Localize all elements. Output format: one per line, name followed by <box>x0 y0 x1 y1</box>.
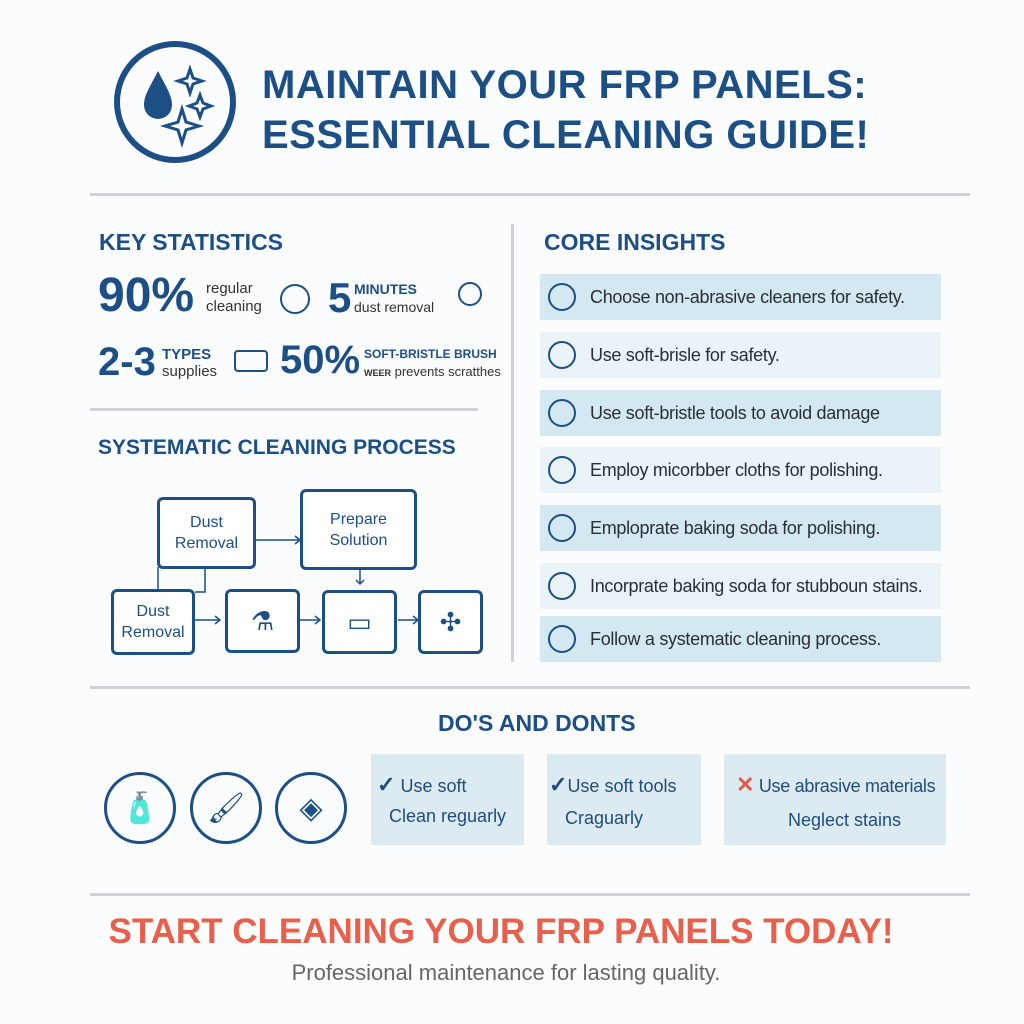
insights list: Use soft-bristle tools to avoid damage <box>590 402 880 422</box>
insights list: Emploprate baking soda for polishing. <box>590 518 880 538</box>
do box 1: Clean reguarly <box>389 806 506 826</box>
process flowchart <box>111 489 483 655</box>
stats: 50% <box>280 338 360 382</box>
title <box>262 63 869 157</box>
do box 2 <box>547 754 701 845</box>
do box 1: ✓ Use soft <box>377 772 466 797</box>
stats: WEER prevents scratthes <box>364 364 501 379</box>
stats: dust removal <box>354 299 434 315</box>
process flowchart: Solution <box>330 532 387 548</box>
stats: regular <box>206 280 253 297</box>
process flowchart: ▭ <box>347 606 372 636</box>
stats: supplies <box>162 363 217 380</box>
process flowchart: Removal <box>121 624 185 641</box>
stats <box>98 269 501 384</box>
heading: core insights: CORE INSIGHTS <box>544 229 725 255</box>
tool icons: 🧴 <box>121 792 159 824</box>
tool icons <box>104 772 347 844</box>
dont box: ✕ Use abrasive materials <box>736 772 935 797</box>
title: ESSENTIAL CLEANING GUIDE! <box>262 113 869 157</box>
insights list: Employ micorbber cloths for polishing. <box>590 460 883 480</box>
stats: cleaning <box>206 298 262 315</box>
insights list <box>540 274 941 662</box>
dont box <box>724 754 946 845</box>
process flowchart: Dust <box>190 514 223 531</box>
do box 2: Craguarly <box>565 808 643 828</box>
subtitle: Professional maintenance for lasting quality. <box>292 960 720 985</box>
process flowchart: Dust <box>137 603 169 620</box>
header icon <box>114 41 236 163</box>
heading: process: SYSTEMATIC CLEANING PROCESS <box>98 436 456 459</box>
do box 2: ✓Use soft tools <box>549 772 676 797</box>
heading: dos and donts: DO'S AND DONTS <box>438 710 636 736</box>
process flowchart: Removal <box>175 535 238 552</box>
dont box: Neglect stains <box>788 810 901 830</box>
insights list: Follow a systematic cleaning process. <box>590 628 881 648</box>
do box 1 <box>371 754 524 845</box>
process flowchart: Prepare <box>330 510 387 528</box>
stats: 5 <box>328 274 351 321</box>
insights list: Incorprate baking soda for stubboun stains. <box>590 576 922 596</box>
insights list: Use soft-brisle for safety. <box>590 344 780 364</box>
process flowchart: ⚗ <box>251 606 274 636</box>
stats: 90% <box>98 269 194 322</box>
stats: 2-3 <box>98 340 156 384</box>
insights list: Choose non-abrasive cleaners for safety. <box>590 286 905 306</box>
tool icons: 🖌 <box>207 792 245 824</box>
stats: MINUTES <box>354 281 417 297</box>
stats: SOFT-BRISTLE BRUSH <box>364 347 497 361</box>
stats: TYPES <box>162 346 211 363</box>
tool icons: ◈ <box>299 792 323 824</box>
call to action: START CLEANING YOUR FRP PANELS TODAY! <box>108 912 894 951</box>
heading: key statistics: KEY STATISTICS <box>99 229 283 255</box>
title: MAINTAIN YOUR FRP PANELS: <box>262 63 867 107</box>
process flowchart: ✣ <box>440 606 461 636</box>
